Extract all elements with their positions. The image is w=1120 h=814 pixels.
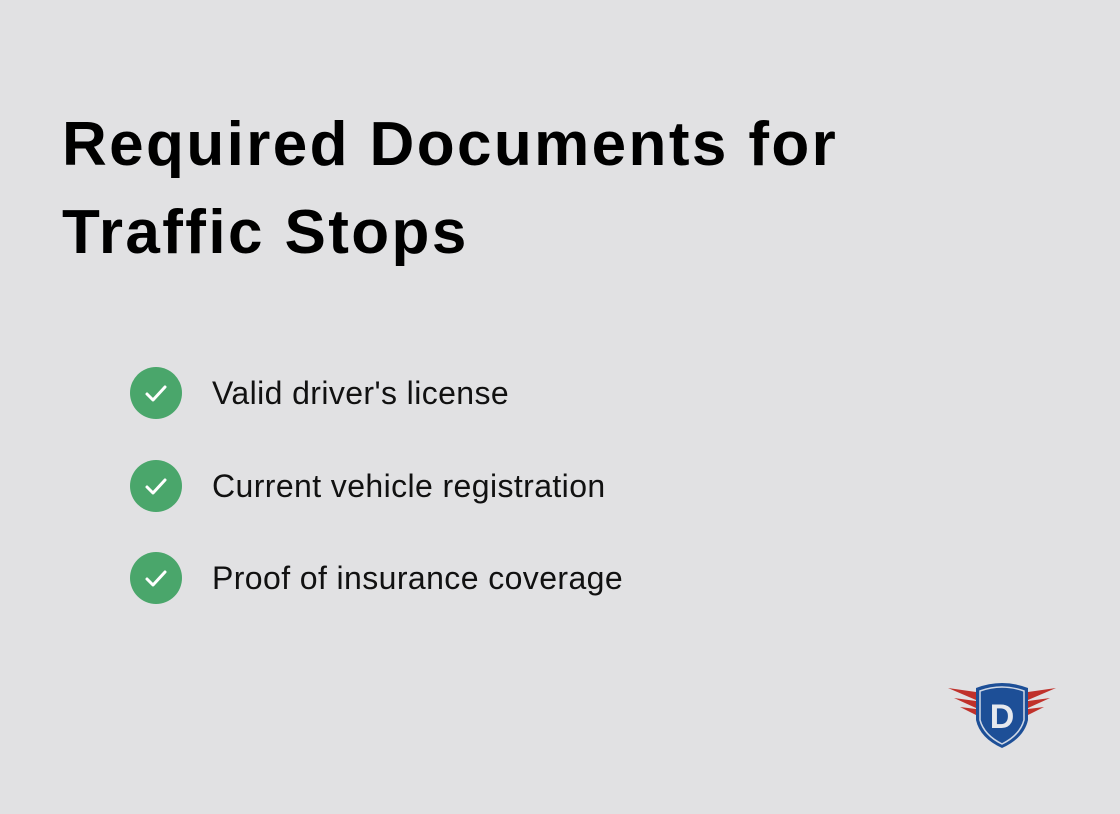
checklist item 3	[130, 552, 623, 604]
checklist item 1	[130, 367, 509, 419]
title	[62, 110, 838, 267]
title: Traffic Stops	[62, 198, 469, 267]
text: Proof of insurance coverage	[212, 560, 623, 596]
logo: winged shield: D	[990, 698, 1014, 736]
text: Current vehicle registration	[212, 468, 606, 504]
icon: check	[130, 552, 182, 604]
icon: check	[130, 367, 182, 419]
checklist item 2	[130, 460, 606, 512]
icon: check	[130, 460, 182, 512]
logo: winged shield	[948, 683, 1056, 748]
text: Valid driver's license	[212, 375, 509, 411]
title: Required Documents for	[62, 110, 838, 179]
